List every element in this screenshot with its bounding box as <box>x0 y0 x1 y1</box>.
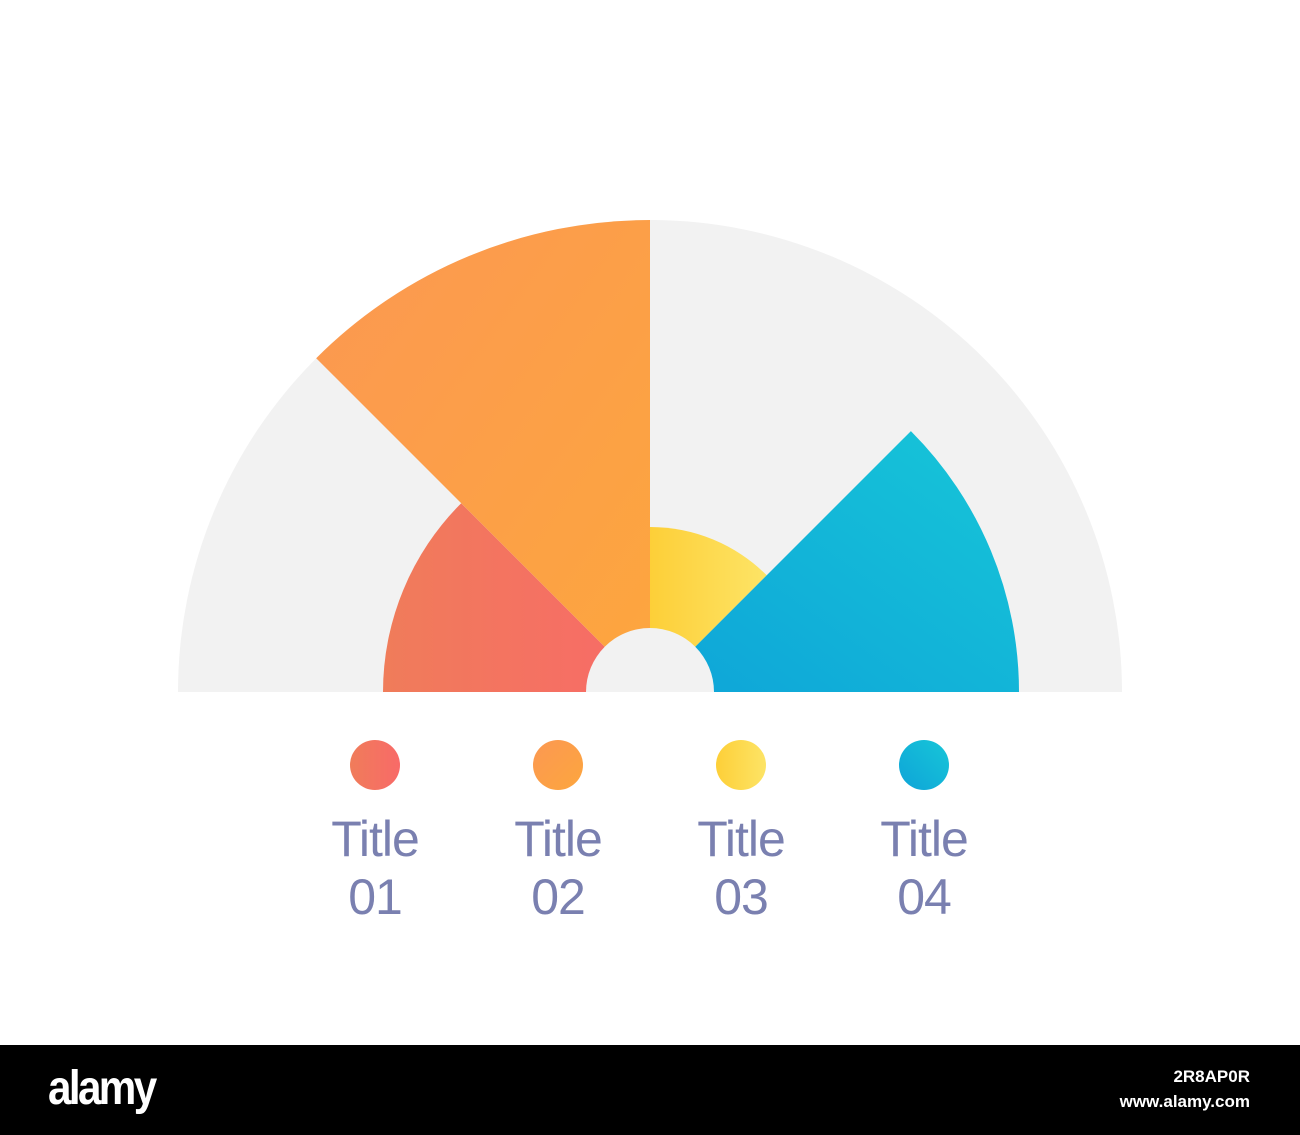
background semicircle <box>178 220 1122 692</box>
legend label 01 <box>331 811 419 925</box>
legend label 02: 02 <box>531 869 585 925</box>
legend label 01: 01 <box>348 869 402 925</box>
segment: yellow <box>650 527 767 692</box>
legend label 03: 03 <box>714 869 768 925</box>
legend label 04: 04 <box>897 869 951 925</box>
footer bar <box>0 1045 1300 1135</box>
segment: red <box>383 503 650 692</box>
legend label 04 <box>880 811 968 925</box>
legend label 02: Title <box>514 811 602 867</box>
footer url: www.alamy.com <box>1120 1092 1250 1111</box>
legend label 03: Title <box>697 811 785 867</box>
footer image id: 2R8AP0R <box>1173 1067 1250 1086</box>
legend label 02 <box>514 811 602 925</box>
legend label 04: Title <box>880 811 968 867</box>
legend label 03 <box>697 811 785 925</box>
segment: orange <box>316 220 650 692</box>
footer logo: alamy <box>48 1062 155 1115</box>
legend dots <box>350 740 949 790</box>
center hole <box>586 628 714 692</box>
segment: blue <box>650 431 1019 692</box>
legend label 01: Title <box>331 811 419 867</box>
